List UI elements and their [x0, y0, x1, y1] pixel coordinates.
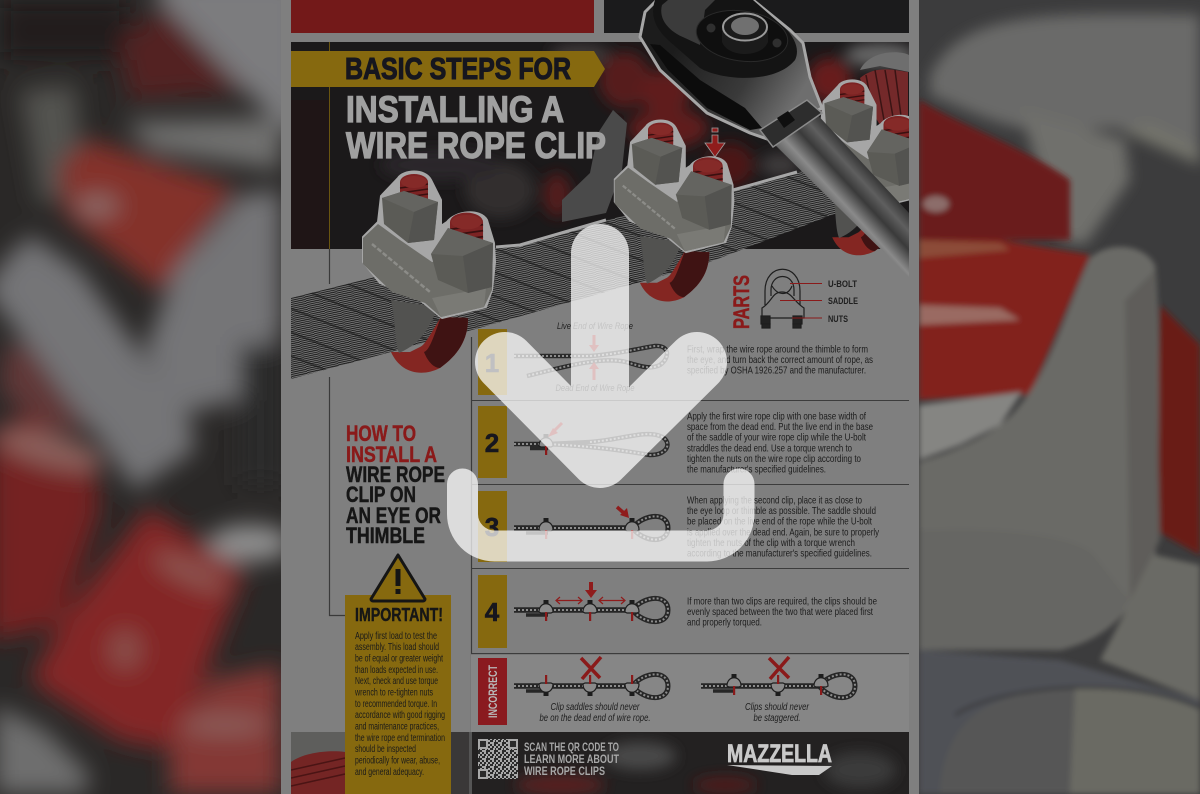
- step 2 text: of the saddle of your wire rope clip while the U-bolt: [687, 432, 866, 444]
- incorrect tag: INCORRECT: [486, 665, 500, 718]
- step 1 text: the eye, and turn back the correct amount of rope, as: [687, 354, 873, 366]
- blurred photo background: left: [0, 0, 292, 794]
- part labels: NUTS: [828, 314, 848, 325]
- step 4 text: [687, 596, 877, 628]
- step 4 text: and properly torqued.: [687, 616, 762, 628]
- step 1 number: 1: [485, 348, 499, 378]
- step 2 text: [687, 410, 873, 476]
- step 3 text: [687, 494, 880, 560]
- caption: [745, 702, 810, 724]
- step 4 number: 4: [485, 597, 500, 627]
- part labels: SADDLE: [828, 296, 858, 307]
- top red panel: [291, 0, 594, 33]
- important body: Apply first load to test the: [355, 631, 437, 642]
- step 1 number: [478, 329, 507, 395]
- step 1 text: specified by OSHA 1926.257 and the manufacturer.: [687, 364, 866, 376]
- part labels: U-BOLT: [828, 279, 857, 290]
- photo: wire rope: [291, 160, 850, 379]
- title banner: [291, 51, 605, 87]
- step 1 diagram: Live End of Wire Rope: [557, 321, 633, 331]
- banner text: BASIC STEPS FOR: [345, 51, 571, 86]
- how to install heading: INSTALL A: [346, 442, 437, 467]
- Mazzella logo: MAZZELLA: [727, 740, 832, 768]
- column and step dividers: [470, 337, 472, 732]
- blurred photo background: right: [919, 0, 1200, 794]
- top black panel: [604, 0, 909, 33]
- QR call to action: [524, 742, 619, 778]
- important body: Next, check and use torque: [355, 676, 438, 687]
- step 3: [478, 491, 880, 562]
- red arrow to nut: [705, 128, 725, 157]
- parts diagram: [729, 269, 858, 329]
- important body: than loads expected in use.: [355, 665, 438, 676]
- step 3 number: 3: [485, 512, 499, 542]
- important body: the wire rope end termination: [355, 733, 445, 744]
- important body: periodically for wear, abuse,: [355, 756, 440, 766]
- red cross: [769, 657, 789, 679]
- photo: torque wrench: [640, 0, 909, 277]
- photo: glove behind clip: [562, 110, 627, 222]
- step 2 diagram: [514, 423, 667, 455]
- important heading: IMPORTANT!: [355, 605, 443, 625]
- red cross: [581, 657, 601, 679]
- step 2 text: the manufacturer's specified guidelines.: [687, 464, 826, 476]
- main title: INSTALLING A: [346, 89, 564, 130]
- step 2 text: Apply the first wire rope clip with one base width of: [687, 410, 866, 422]
- caption: be staggered.: [754, 713, 800, 724]
- important body: [354, 631, 445, 778]
- important body: wrench to re-tighten nuts: [354, 688, 433, 698]
- incorrect tag: [478, 658, 507, 725]
- step 2 text: straddles the dead end. Use a torque wrench to: [687, 442, 852, 454]
- step 4 diagram: [514, 582, 668, 622]
- step 1: [478, 321, 873, 395]
- step 2 number: 2: [485, 428, 499, 458]
- step 2 text: space from the dead end. Put the live end in the base: [687, 421, 873, 433]
- step 3 text: When applying the second clip, place it as close to: [687, 494, 862, 506]
- vertical accent line in hero: [329, 42, 330, 249]
- important panel: [345, 555, 451, 794]
- step 2: [478, 406, 873, 478]
- photo: right clip: [820, 79, 909, 256]
- important body: assembly. This load should: [355, 642, 439, 653]
- caption: be on the dead end of wire rope.: [540, 713, 650, 724]
- how to install heading: CLIP ON: [346, 482, 416, 507]
- important body: should be inspected: [355, 744, 416, 755]
- important body: and general adequacy.: [355, 767, 424, 778]
- how to install heading: HOW TO: [346, 421, 416, 446]
- part labels: [828, 279, 858, 325]
- main title: WIRE ROPE CLIP: [346, 125, 606, 166]
- footer photo band: [291, 732, 909, 794]
- photo: middle clip: [615, 120, 734, 301]
- photo: left clip: [363, 172, 495, 373]
- icon: download overlay: [462, 253, 739, 546]
- step 4: [478, 575, 877, 648]
- step 4 number: [478, 575, 507, 648]
- caption: Clip saddles should never: [550, 702, 640, 713]
- step 4 text: evenly spaced between the two that were placed first: [687, 606, 873, 618]
- step 3 text: is applied over the dead end. Again, be sure to properly: [687, 526, 880, 538]
- important body: be of equal or greater weight: [355, 654, 443, 664]
- step 3 diagram: [514, 507, 668, 540]
- step 1 diagram: Dead End of Wire Rope: [556, 383, 634, 393]
- incorrect band shading: [471, 654, 909, 732]
- step 3 text: be placed on the live end of the rope while the U-bolt: [687, 516, 872, 528]
- Mazzella logo: [727, 740, 832, 775]
- step 1 diagram: [514, 321, 667, 393]
- important body: and maintenance practices,: [355, 722, 439, 732]
- clip line drawing: [761, 269, 804, 328]
- step 1 text: First, wrap the wire rope around the thimble to form: [687, 344, 868, 356]
- how to install heading: WIRE ROPE: [346, 462, 445, 487]
- caption: [540, 702, 650, 724]
- step 3 text: according to the manufacturer's specified guidelines.: [687, 548, 872, 560]
- caption: Clips should never: [745, 702, 810, 713]
- step 3 text: the eye loop or thimble as possible. The saddle should: [687, 505, 876, 517]
- left frame line: [330, 249, 346, 616]
- important body: to recommended torque. In: [355, 699, 437, 710]
- QR call to action: LEARN MORE ABOUT: [524, 754, 619, 766]
- incorrect diagram 2: [701, 657, 855, 724]
- important body: accordance with good rigging: [355, 710, 445, 721]
- step 1 text: [687, 344, 873, 376]
- incorrect diagram 1: [514, 657, 668, 724]
- parts heading: PARTS: [729, 275, 754, 329]
- how to install heading: THIMBLE: [346, 523, 425, 548]
- step 3 text: tighten the nuts of the clip with a torque wrench: [687, 537, 855, 549]
- warning icon: [371, 555, 425, 601]
- step 2 text: tighten the nuts on the wire rope clip according to: [687, 453, 861, 465]
- hero photo background: [291, 42, 915, 249]
- how to install heading: [346, 421, 445, 548]
- step 3 number: [478, 491, 507, 562]
- QR call to action: SCAN THE QR CODE TO: [524, 742, 619, 754]
- QR call to action: WIRE ROPE CLIPS: [524, 766, 605, 778]
- step 4 text: If more than two clips are required, the clips should be: [687, 596, 877, 608]
- QR code: [478, 739, 518, 779]
- poster sheet: [281, 0, 919, 794]
- step 2 number: [478, 406, 507, 478]
- how to install heading: AN EYE OR: [346, 503, 441, 528]
- main title: [346, 89, 606, 166]
